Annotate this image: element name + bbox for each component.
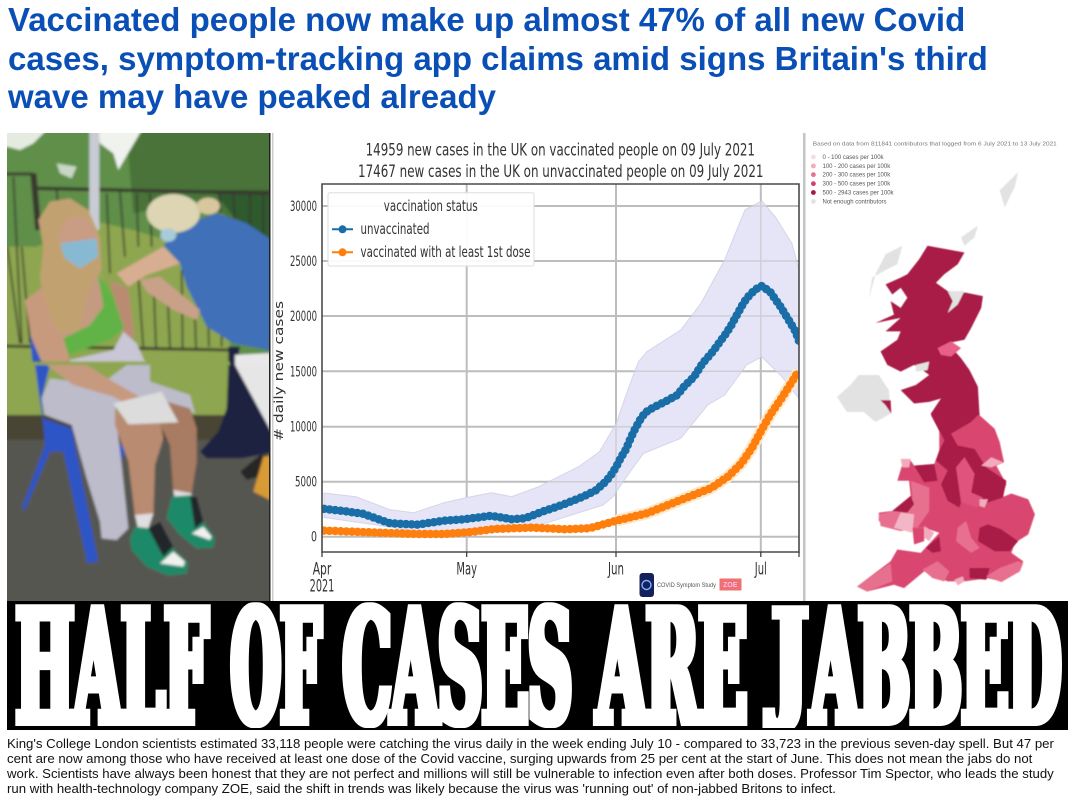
map legend: 200 - 300 cases per 100k xyxy=(822,173,891,179)
headline text: CASES xyxy=(343,576,572,759)
logo: COVID Symptom Study / ZOE: COVID Symptom Study xyxy=(657,582,717,589)
body paragraph xyxy=(7,736,1054,796)
chart title xyxy=(358,140,764,182)
line: unvaccinated xyxy=(324,286,800,525)
y axis tick labels: 15000 xyxy=(290,364,317,380)
legend: vaccination status: vaccinated with at least 1st dose xyxy=(360,243,530,261)
map: Scotland xyxy=(869,172,1018,440)
headline text: J xyxy=(766,581,808,734)
y axis tick labels: 30000 xyxy=(290,199,317,215)
headline text: HALF xyxy=(16,576,208,759)
logo: COVID Symptom Study / ZOE: ZOE xyxy=(723,582,738,589)
line: vaccinated xyxy=(324,372,798,534)
body paragraph: work. Scientists have always been honest that they are not perfect and millions will still be vulnerable to infection even after both doses. Professor Tim Spector, who leads the study xyxy=(7,766,1054,781)
panel: daily new cases line chart xyxy=(271,133,806,601)
panel: UK case-rate map xyxy=(811,142,1057,591)
map legend xyxy=(811,155,895,206)
title: Vaccinated people now make up almost 47% of all new Covid xyxy=(8,1,965,38)
confidence band: unvaccinated xyxy=(324,201,800,533)
y axis tick labels: 10000 xyxy=(290,420,317,436)
legend: vaccination status: unvaccinated xyxy=(360,220,430,238)
x axis labels: Apr xyxy=(313,560,331,580)
y axis tick labels xyxy=(290,199,317,546)
logo: COVID Symptom Study / ZOE xyxy=(640,573,742,597)
x axis labels: 2021 xyxy=(310,577,334,597)
body paragraph: cent are now among those who have received at least one dose of the Covid vaccine, surging upwards from 25 per cent at the start of June. This does not mean the jabs do not xyxy=(7,751,1032,766)
chart title: 17467 new cases in the UK on unvaccinated people on 09 July 2021 xyxy=(358,162,764,182)
y axis tick labels: 20000 xyxy=(290,309,317,325)
photo: woman receiving vaccine xyxy=(0,130,277,607)
legend: vaccination status: vaccination status xyxy=(384,197,478,215)
map note: Based on data from 811841 contributors that logged from 6 July 2021 to 13 July 2021 xyxy=(813,142,1057,148)
map legend: Not enough contributors xyxy=(822,200,887,206)
headline text xyxy=(15,602,1062,728)
title: cases, symptom-tracking app claims amid signs Britain's third xyxy=(8,40,988,76)
map legend: 100 - 200 cases per 100k xyxy=(822,164,891,170)
y axis tick labels: 5000 xyxy=(295,475,317,491)
y axis label: # daily new cases xyxy=(272,301,286,441)
title: wave may have peaked already xyxy=(8,78,496,115)
banner: black headline strip xyxy=(7,601,1068,730)
headline text: OF xyxy=(231,576,321,759)
body paragraph: King's College London scientists estimated 33,118 people were catching the virus daily in the week ending July 10 - compared to 33,723 in the previous seven-day spell. But 47 per xyxy=(7,736,1054,751)
map legend: 300 - 500 cases per 100k xyxy=(822,182,891,188)
body paragraph: run with health-technology company ZOE, said the shift in trends was likely because the virus was 'running out' of non-jabbed Britons to infect. xyxy=(7,781,836,796)
y axis tick labels: 0 xyxy=(311,530,317,546)
legend: vaccination status xyxy=(328,193,534,266)
headline text: ARE xyxy=(596,576,747,759)
chart title: 14959 new cases in the UK on vaccinated people on 09 July 2021 xyxy=(366,140,755,160)
x axis labels: Jun xyxy=(607,560,624,580)
map: England and Wales xyxy=(837,375,1035,591)
x axis labels: May xyxy=(456,560,477,580)
x axis labels: Jul xyxy=(754,560,767,580)
y axis tick labels: 25000 xyxy=(290,254,317,270)
map legend: 500 - 2943 cases per 100k xyxy=(822,190,895,196)
x axis labels xyxy=(310,560,767,597)
map legend: 0 - 100 cases per 100k xyxy=(822,155,885,161)
title xyxy=(8,1,988,115)
